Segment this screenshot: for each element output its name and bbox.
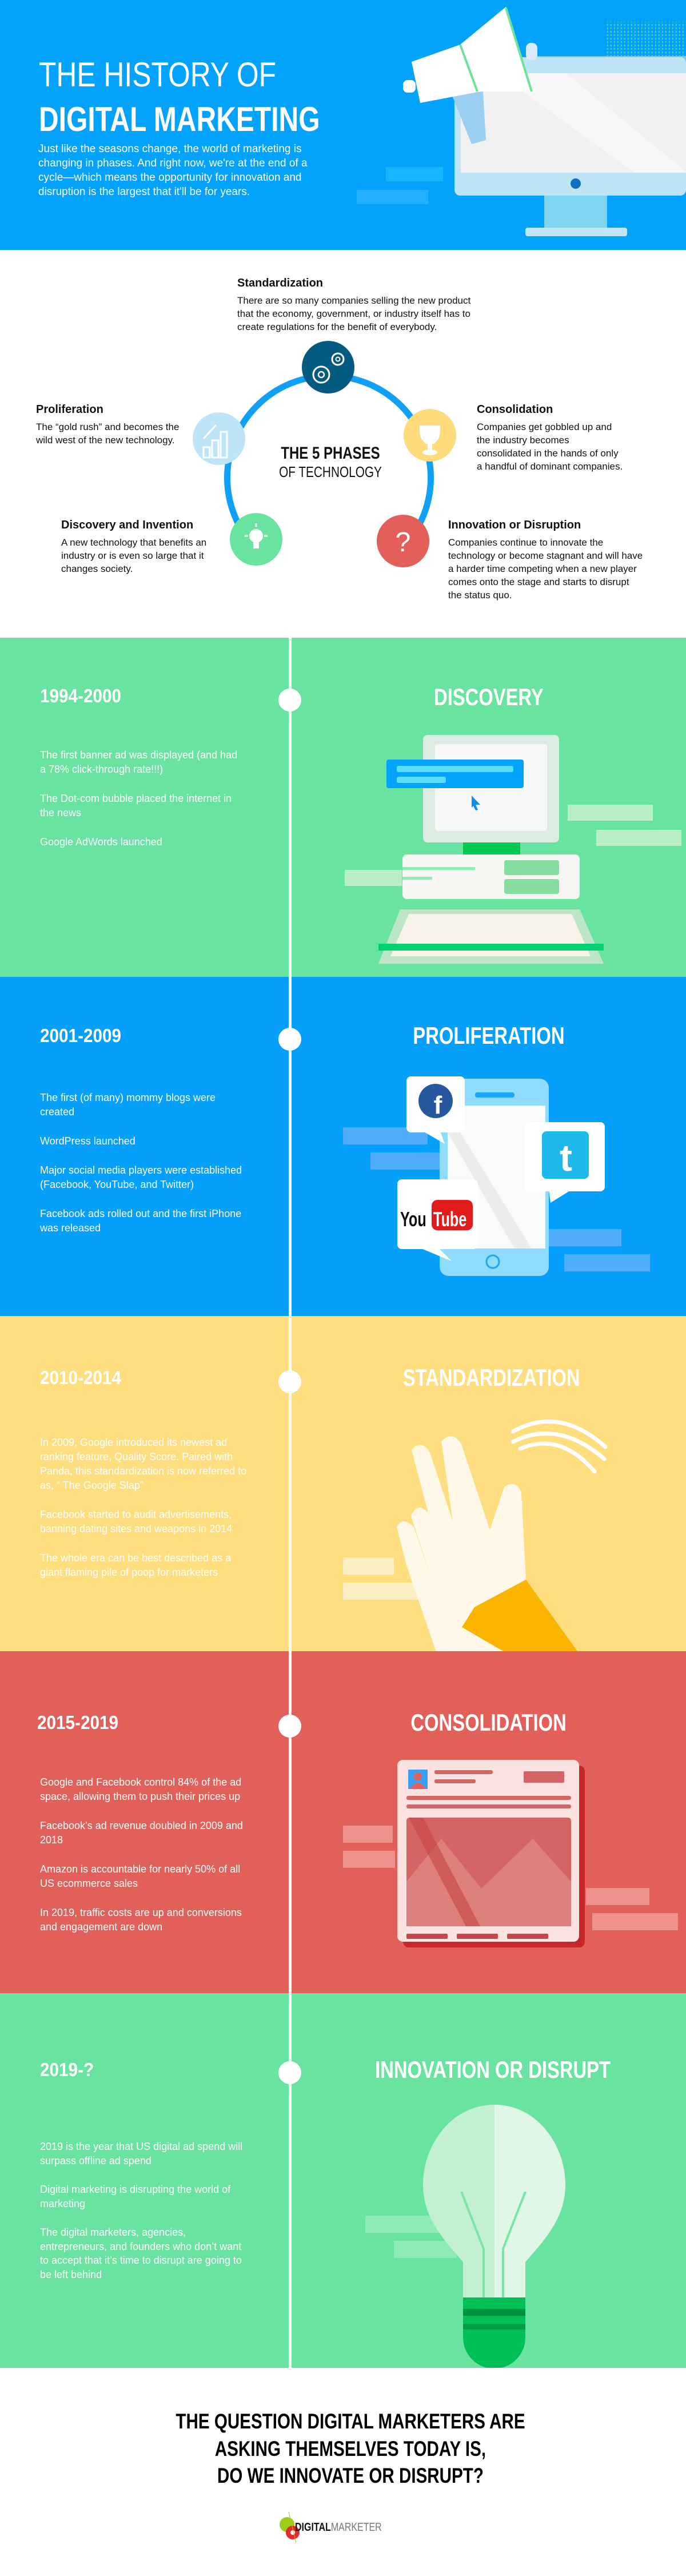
bullets: US ecommerce sales xyxy=(40,1878,138,1889)
closing question: ASKING THEMSELVES TODAY IS, xyxy=(215,2436,486,2460)
illustration: megaphone and monitor xyxy=(357,7,686,236)
bullets: Facebook started to audit advertisements, xyxy=(40,1509,232,1520)
cycle diagram xyxy=(193,341,456,567)
bullets: was released xyxy=(40,1222,101,1234)
illustration: lightbulb xyxy=(365,2105,565,2368)
text: discovery and invention xyxy=(61,519,206,574)
logo: digital marketer xyxy=(280,2512,382,2543)
text: discovery and invention: changes society. xyxy=(61,563,133,574)
bullets xyxy=(40,1092,242,1234)
bullets: entrepreneurs, and founders who don’t want xyxy=(40,2241,241,2252)
illustration: phone with social icons: You xyxy=(400,1208,426,1231)
text: innovation or disruption: technology or become stagnant and will have xyxy=(448,550,643,561)
text: consolidation: consolidated in the hands of only xyxy=(477,448,619,459)
intro paragraph: Just like the seasons change, the world of marketing is xyxy=(38,143,301,155)
center label xyxy=(279,443,382,480)
year: 2015-2019 xyxy=(37,1712,118,1733)
bullets: Major social media players were established xyxy=(40,1164,242,1176)
icon: lightbulb xyxy=(230,513,282,566)
timeline line xyxy=(289,638,292,2368)
illustration: phone with social icons: t xyxy=(560,1136,572,1179)
bullets: be left behind xyxy=(40,2268,102,2280)
bullets: to accept that it’s time to disrupt are going to xyxy=(40,2255,242,2266)
bullets: surpass offline ad spend xyxy=(40,2155,151,2166)
bullets: created xyxy=(40,1106,74,1118)
bullets: 2018 xyxy=(40,1834,63,1846)
illustration: computer xyxy=(345,735,681,964)
bullets: the news xyxy=(40,807,81,818)
bullets: Facebook ads rolled out and the first iPhone xyxy=(40,1208,241,1219)
bullets: The Dot-com bubble placed the internet in xyxy=(40,793,232,804)
text: proliferation: Proliferation xyxy=(36,403,103,416)
bullets: The first banner ad was displayed (and had xyxy=(40,749,237,761)
text: innovation or disruption: the status quo. xyxy=(448,590,512,601)
bullets xyxy=(40,1776,243,1933)
icon: question mark xyxy=(377,515,429,567)
title xyxy=(39,55,320,138)
text: standardization: Standardization xyxy=(237,277,323,289)
bullets: The first (of many) mommy blogs were xyxy=(40,1092,216,1103)
text: discovery and invention: Discovery and Invention xyxy=(61,519,193,531)
bullets: space, allowing them to push their prices up xyxy=(40,1791,240,1802)
panel: standardization xyxy=(0,1316,686,1651)
bullets xyxy=(40,2141,242,2280)
heading: CONSOLIDATION xyxy=(411,1709,567,1736)
bullets: and engagement are down xyxy=(40,1921,162,1933)
panel: discovery xyxy=(0,638,686,977)
icon: trophy xyxy=(404,409,456,462)
title: THE HISTORY OF xyxy=(39,55,276,94)
year: 2001-2009 xyxy=(40,1025,121,1046)
text: proliferation: The “gold rush” and becomes the xyxy=(36,422,179,432)
bullets: WordPress launched xyxy=(40,1135,135,1147)
illustration: phone with social icons xyxy=(343,1076,650,1276)
text: proliferation xyxy=(36,403,179,446)
text: discovery and invention: A new technology that benefits an xyxy=(61,537,206,548)
closing question xyxy=(176,2410,525,2487)
panel: proliferation xyxy=(0,977,686,1316)
icon: question mark: ? xyxy=(396,527,410,558)
logo: digital marketer: DIGITALMARKETER xyxy=(295,2521,382,2534)
bullets: Digital marketing is disrupting the world of xyxy=(40,2184,230,2195)
bullets: The digital marketers, agencies, xyxy=(40,2227,186,2238)
bullets xyxy=(40,749,237,848)
bullets: marketing xyxy=(40,2197,85,2209)
text: consolidation: the industry becomes xyxy=(477,435,569,446)
bullets: Amazon is accountable for nearly 50% of all xyxy=(40,1863,240,1875)
text: consolidation: Companies get gobbled up and xyxy=(477,422,612,432)
bullets: Facebook’s ad revenue doubled in 2009 and xyxy=(40,1820,243,1831)
year: 2010-2014 xyxy=(40,1367,121,1388)
bullets: The whole era can be best described as a xyxy=(40,1552,231,1564)
bullets xyxy=(40,1437,246,1578)
bullets: In 2019, traffic costs are up and conversions xyxy=(40,1907,242,1918)
intro paragraph: disruption is the largest that it'll be for years. xyxy=(38,186,250,198)
illustration: hand xyxy=(343,1420,607,1651)
icon: gears xyxy=(302,341,354,393)
bullets: a 78% click-through rate!!!) xyxy=(40,764,163,775)
bullets: Google AdWords launched xyxy=(40,836,162,848)
bullets: as, “ The Google Slap” xyxy=(40,1480,143,1491)
heading: STANDARDIZATION xyxy=(403,1364,580,1391)
closing question: DO WE INNOVATE OR DISRUPT? xyxy=(217,2464,484,2487)
heading: INNOVATION OR DISRUPT xyxy=(375,2056,611,2083)
text: standardization: that the economy, government, or industry itself has to xyxy=(237,308,470,319)
bullets: 2019 is the year that US digital ad spend will xyxy=(40,2141,242,2152)
text: innovation or disruption: a harder time competing when a new player xyxy=(448,563,637,574)
bullets: (Facebook, YouTube, and Twitter) xyxy=(40,1179,194,1190)
heading: DISCOVERY xyxy=(434,683,544,710)
intro paragraph: cycle—which means the opportunity for innovation and xyxy=(38,172,301,184)
panel: innovation or disrupt xyxy=(0,1993,686,2368)
text: consolidation xyxy=(477,403,623,472)
icon: growth chart xyxy=(193,412,245,465)
panel: consolidation xyxy=(0,1651,686,1993)
text: proliferation: wild west of the new technology. xyxy=(36,435,175,446)
text: innovation or disruption: Innovation or Disruption xyxy=(448,519,581,531)
text: innovation or disruption: comes onto the stage and starts to disrupt xyxy=(448,577,629,587)
bullets: banning dating sites and weapons in 2014 xyxy=(40,1523,232,1535)
center label: OF TECHNOLOGY xyxy=(279,464,382,480)
text: consolidation: a handful of dominant companies. xyxy=(477,461,623,472)
text: standardization: There are so many companies selling the new product xyxy=(237,295,470,306)
text: discovery and invention: industry or is even so large that it xyxy=(61,550,204,561)
bullets: In 2009, Google introduced its newest ad xyxy=(40,1437,227,1448)
center label: THE 5 PHASES xyxy=(281,443,380,463)
panel: 5 phases of technology xyxy=(0,250,686,638)
intro paragraph: changing in phases. And right now, we're at the end of a xyxy=(38,157,308,169)
heading: PROLIFERATION xyxy=(413,1022,565,1049)
year: 1994-2000 xyxy=(40,685,121,706)
bullets: Google and Facebook control 84% of the ad xyxy=(40,1776,241,1788)
bullets: ranking feature, Quality Score. Paired with xyxy=(40,1451,233,1462)
intro paragraph xyxy=(38,143,308,198)
illustration: phone with social icons: f xyxy=(434,1091,442,1119)
text: consolidation: Consolidation xyxy=(477,403,553,416)
illustration: phone with social icons: Tube xyxy=(433,1208,466,1231)
header panel xyxy=(0,0,686,250)
text: standardization xyxy=(237,277,471,332)
illustration: social post card xyxy=(343,1760,678,1947)
text: standardization: create regulations for the benefit of everybody. xyxy=(237,321,437,332)
year: 2019-? xyxy=(40,2059,94,2080)
bullets: Panda, this standardization is now referred to xyxy=(40,1465,246,1477)
bullets: giant flaming pile of poop for marketers xyxy=(40,1567,218,1578)
text: innovation or disruption: Companies continue to innovate the xyxy=(448,537,603,548)
closing question: THE QUESTION DIGITAL MARKETERS ARE xyxy=(176,2410,525,2433)
text: innovation or disruption xyxy=(448,519,643,601)
title: DIGITAL MARKETING xyxy=(39,100,320,138)
